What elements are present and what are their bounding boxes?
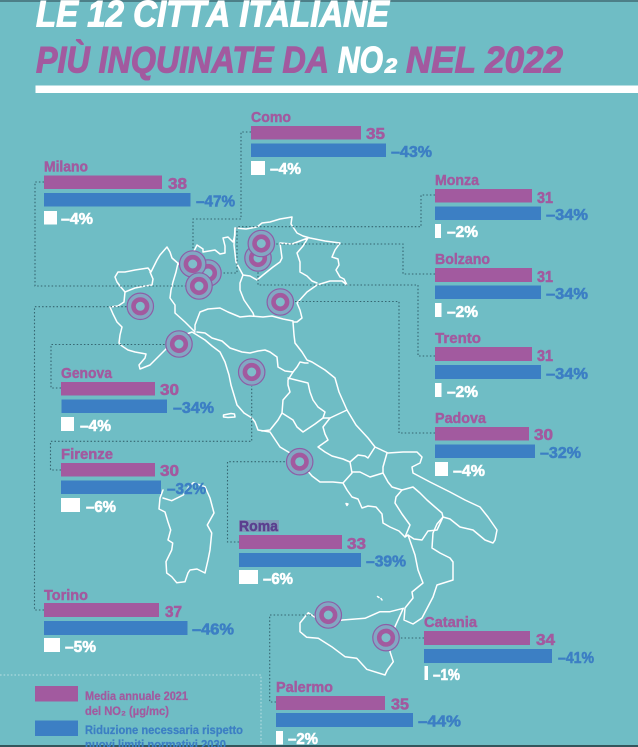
panel: Milano: Milano	[44, 158, 88, 176]
panel: Roma: –6%	[263, 571, 293, 588]
panel: Padova: –32%	[540, 445, 581, 462]
title: PIÙ INQUINATE DA	[36, 40, 329, 81]
panel: Torino	[44, 587, 234, 656]
panel: Padova: Padova	[435, 410, 487, 427]
panel: Padova	[435, 410, 581, 480]
legend: Media annuale 2021	[85, 689, 188, 703]
panel: Trento: –2%	[447, 384, 478, 401]
panel: Como: Como	[251, 109, 291, 126]
panel: Genova: 30	[160, 382, 179, 399]
panel: Monza: 31	[537, 190, 553, 207]
panel: Genova: Genova	[61, 365, 113, 382]
panel: Bolzano	[435, 251, 588, 321]
panel: Monza: Monza	[435, 172, 480, 189]
panel: Milano: –47%	[196, 194, 235, 210]
title: NO	[338, 40, 383, 81]
panel: Trento: 31	[537, 348, 553, 365]
panel: Monza: –2%	[447, 224, 478, 241]
panel: Milano: –4%	[61, 211, 93, 228]
south regions	[383, 473, 443, 517]
panel: Roma: –39%	[366, 554, 406, 570]
panel: Monza	[435, 172, 588, 241]
Isole Eolie	[378, 596, 382, 600]
panel: Bolzano: Bolzano	[435, 251, 490, 268]
panel: Firenze: –6%	[86, 499, 116, 516]
panel: Roma	[239, 518, 406, 588]
central regions	[197, 332, 308, 372]
panel: Firenze: Firenze	[61, 446, 113, 463]
panel: Milano: 38	[168, 176, 187, 193]
Sardegna	[159, 483, 214, 583]
panel: Firenze	[61, 446, 206, 516]
Sicilia	[300, 608, 403, 675]
panel: Como	[251, 109, 432, 178]
panel: Palermo	[276, 679, 461, 747]
panel: Roma: 33	[347, 536, 366, 553]
panel: Catania: 34	[536, 632, 555, 649]
panel: Bolzano: 31	[537, 269, 553, 286]
title: NEL 2022	[406, 40, 563, 81]
Valle d'Aosta, Piemonte and Lombardia borders	[125, 272, 153, 292]
panel: Bolzano: –2%	[447, 304, 478, 321]
panel: Genova: –4%	[80, 418, 111, 435]
panel: Torino: 37	[165, 604, 182, 621]
panel: Torino: –5%	[65, 639, 96, 656]
panel: Trento	[435, 330, 588, 401]
panel: Firenze: 30	[160, 463, 179, 480]
panel: Como: –4%	[270, 161, 301, 178]
panel: Genova	[61, 365, 214, 435]
panel: Trento: –34%	[546, 366, 588, 383]
Elba	[224, 414, 235, 418]
panel: Genova: –34%	[173, 400, 214, 417]
panel: Padova: –4%	[453, 463, 485, 480]
leader lines	[34, 132, 435, 702]
panel: Catania: Catania	[424, 614, 478, 631]
legend: Riduzione necessaria rispetto	[85, 723, 243, 737]
panel: Padova: 30	[534, 427, 553, 444]
panel: Roma: Roma	[239, 518, 279, 535]
panel: Catania	[424, 614, 594, 684]
panel: Torino: –46%	[192, 622, 234, 638]
title	[36, 0, 563, 81]
city markers	[127, 230, 399, 651]
panel: Monza: –34%	[546, 207, 588, 224]
panel: Palermo: –44%	[418, 714, 461, 730]
panel: Milano	[44, 158, 235, 228]
panel: Palermo: Palermo	[276, 679, 333, 696]
panel: Bolzano: –34%	[546, 286, 588, 303]
panel: Torino: Torino	[44, 587, 88, 604]
panel: Palermo: 35	[391, 696, 409, 714]
map of Italy	[110, 217, 497, 675]
panel: Como: 35	[366, 126, 385, 143]
panel: Catania: –1%	[433, 667, 460, 684]
title: 2	[384, 56, 397, 78]
panel: Trento: Trento	[435, 330, 481, 347]
panel: Firenze: –32%	[167, 481, 206, 498]
panel: Como: –43%	[391, 144, 432, 161]
panel: Catania: –41%	[558, 650, 594, 667]
Ischia	[346, 504, 348, 506]
legend	[0, 675, 261, 747]
legend: del NO₂ (µg/mc)	[85, 704, 169, 718]
